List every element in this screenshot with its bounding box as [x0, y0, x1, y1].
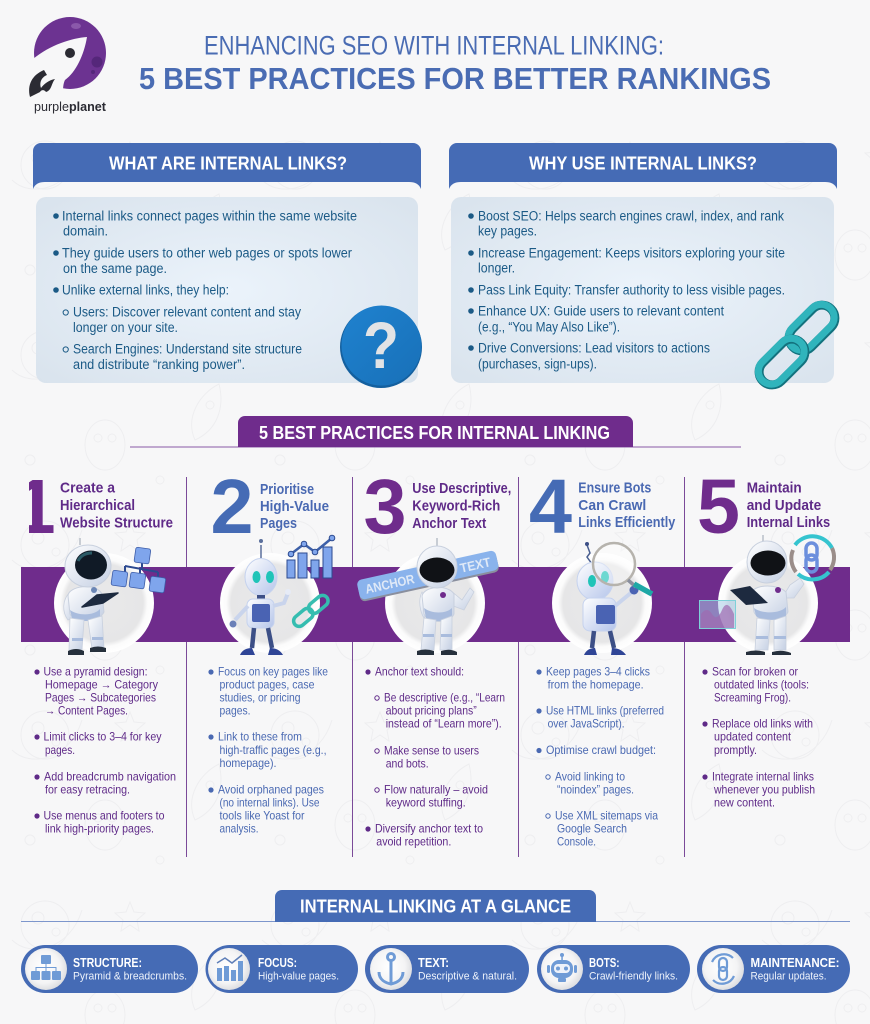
- step 2: prioritise high-value pages: [208, 464, 335, 836]
- step heading 4: [578, 479, 676, 531]
- step heading 1: [60, 480, 173, 532]
- step 4 list: Keep pages 3–4 clicks: [546, 664, 650, 678]
- icon: sync link: [712, 954, 734, 984]
- step 4 list: Avoid linking to: [555, 770, 625, 784]
- step 1 list: Use a pyramid design:: [44, 664, 148, 678]
- panel header: what are internal links: WHAT ARE INTERNAL LINKS?: [109, 154, 347, 174]
- summary pill: maintenance: Regular updates.: [750, 970, 826, 982]
- step 3 list: Make sense to users: [384, 744, 479, 758]
- step 3 list: about pricing plans”: [386, 704, 477, 718]
- step 3 list: [365, 664, 505, 848]
- step 3 list: instead of “Learn more”).: [386, 716, 502, 730]
- summary pill: bots: Crawl-friendly links.: [589, 970, 678, 982]
- step heading 3: Use Descriptive,: [412, 480, 511, 497]
- step 4 list: from the homepage.: [548, 678, 644, 692]
- step 3 list: and bots.: [386, 756, 429, 770]
- step 1 list: for easy retracing.: [45, 782, 130, 796]
- step 2 list: product pages, case: [220, 678, 315, 692]
- step 5: maintain and update internal links: [697, 464, 834, 810]
- icon: anchor: [379, 954, 403, 984]
- step 5 list: promptly.: [714, 743, 757, 757]
- summary pill: bots: [537, 945, 690, 993]
- step heading 2: Pages: [260, 515, 297, 532]
- summary pill: bots: BOTS:: [589, 956, 620, 970]
- summary pill: text: Descriptive & natural.: [418, 970, 517, 982]
- icon: hierarchy: [31, 955, 61, 980]
- step heading 5: Maintain: [747, 480, 802, 497]
- summary pill: focus: FOCUS:: [258, 956, 297, 970]
- panel body: benefits list: (purchases, sign-ups).: [478, 356, 597, 372]
- step 2 list: Focus on key pages like: [218, 664, 328, 678]
- illustration: astronaut with anchor text bar: TEXT: [458, 554, 492, 576]
- step 5 list: Integrate internal links: [712, 770, 814, 784]
- step 1 list: Homepage → Category: [45, 678, 158, 692]
- summary pill: focus: High-value pages.: [258, 970, 339, 982]
- step number 4: 4: [529, 464, 572, 550]
- step 4 list: Google Search: [557, 822, 627, 836]
- step heading 3: Keyword-Rich: [412, 498, 500, 515]
- step 4 list: “noindex” pages.: [557, 782, 634, 796]
- panel body: definition list: Search Engines: Understand site structure: [73, 342, 302, 356]
- step 3 list: Anchor text should:: [375, 664, 464, 678]
- panel body: definition list: longer on your site.: [73, 320, 178, 335]
- step 4 list: Optimise crawl budget:: [546, 743, 656, 757]
- summary pill: maintenance: [697, 945, 850, 993]
- panel: why use internal links: [449, 143, 840, 390]
- step 4 list: [536, 664, 664, 848]
- step 2 list: (no internal links). Use: [220, 796, 320, 810]
- summary pill: structure: STRUCTURE:: [73, 956, 142, 970]
- step 2 list: [208, 664, 328, 836]
- panel body: definition list: Unlike external links, they help:: [62, 282, 229, 298]
- step 4 list: over JavaScript).: [548, 716, 625, 730]
- step 5 list: new content.: [714, 796, 775, 810]
- panel body: definition list: Users: Discover relevant content and stay: [73, 304, 301, 320]
- panel body: definition list: [36, 197, 418, 383]
- panel body: definition list: Internal links connect pages within the same website: [62, 208, 357, 224]
- step 2 list: high-traffic pages (e.g.,: [220, 743, 326, 757]
- panel body: definition list: on the same page.: [63, 261, 167, 276]
- icon: question mark: ?: [363, 308, 399, 382]
- step 2 list: Avoid orphaned pages: [218, 782, 324, 796]
- section banner: 5 best practices: [130, 416, 741, 447]
- step 1 list: link high-priority pages.: [45, 822, 154, 836]
- summary pill: structure: Pyramid & breadcrumbs.: [73, 970, 187, 982]
- step 1 list: Add breadcrumb navigation: [44, 770, 176, 784]
- step heading 4: Links Efficiently: [578, 514, 676, 531]
- step 5 list: updated content: [714, 730, 792, 744]
- panel body: benefits list: longer.: [478, 260, 515, 276]
- summary pill: maintenance: MAINTENANCE:: [750, 956, 840, 970]
- illustration: astronaut with anchor text bar: ANCHOR: [364, 571, 416, 597]
- step heading 4: Ensure Bots: [578, 479, 651, 496]
- panel body: definition list: domain.: [63, 224, 108, 238]
- panel body: benefits list: Drive Conversions: Lead visitors to actions: [478, 340, 710, 356]
- step 3: use descriptive, keyword-rich anchor text: [356, 464, 511, 848]
- panel header: why use internal links: [449, 143, 837, 189]
- panel body: benefits list: Boost SEO: Helps search engines crawl, index, and rank: [478, 208, 784, 224]
- panel body: definition list: They guide users to other web pages or spots lower: [62, 246, 352, 260]
- step 4: ensure bots can crawl links efficiently: [529, 464, 676, 848]
- step 5 list: [702, 664, 815, 810]
- purple band behind characters: [21, 567, 850, 642]
- panel: what are internal links: [33, 143, 422, 388]
- summary pill: focus: [206, 945, 358, 993]
- step number 2: 2: [210, 464, 254, 550]
- section banner: 5 best practices: 5 BEST PRACTICES FOR INTERNAL LINKING: [259, 423, 610, 443]
- icon: question mark: [340, 306, 422, 388]
- icon: chain link: [753, 299, 840, 390]
- step heading 2: Prioritise: [260, 481, 314, 498]
- step 1 list: pages.: [45, 743, 75, 757]
- step 2 list: analysis.: [220, 822, 258, 836]
- step 1: create a hierarchical website structure: [29, 480, 176, 835]
- step 2 list: studies, or pricing: [220, 690, 300, 704]
- step heading 1: Website Structure: [60, 515, 173, 532]
- step number 5: 5: [697, 464, 740, 550]
- step 5 list: whenever you publish: [713, 782, 815, 796]
- step heading 3: Anchor Text: [412, 515, 486, 532]
- step 3 list: keyword stuffing.: [386, 796, 466, 810]
- logo: purpleplanet: purpleplanet: [34, 99, 107, 114]
- step 2 list: pages.: [220, 704, 250, 718]
- step 2 list: Link to these from: [218, 730, 302, 744]
- step heading 2: [260, 481, 329, 532]
- logo: purpleplanet: [28, 17, 107, 114]
- title: ENHANCING SEO WITH INTERNAL LINKING:: [204, 30, 664, 60]
- step heading 3: [412, 480, 511, 532]
- step heading 1: Create a: [60, 480, 116, 497]
- step 5 list: outdated links (tools:: [714, 678, 809, 692]
- summary pill: structure: [21, 945, 198, 993]
- step 1 list: Limit clicks to 3–4 for key: [44, 730, 162, 744]
- panel body: benefits list: Pass Link Equity: Transfer authority to less visible pages.: [478, 282, 785, 298]
- step 1 list: Use menus and footers to: [44, 808, 165, 822]
- illustration: astronaut with anchor text bar: [356, 538, 500, 655]
- step 2 list: homepage).: [220, 756, 276, 770]
- step 3 list: Be descriptive (e.g., “Learn: [384, 690, 505, 704]
- step 4 list: Use XML sitemaps via: [555, 808, 658, 822]
- illustration: astronaut with hierarchy diagram: [54, 538, 166, 655]
- step 5 list: Scan for broken or: [712, 664, 798, 678]
- section banner: internal linking at a glance: [21, 890, 850, 922]
- step 2 list: tools like Yoast for: [220, 808, 304, 822]
- step heading 5: and Update: [747, 497, 821, 514]
- step 4 list: Console.: [557, 834, 596, 848]
- title: [139, 30, 771, 96]
- panel body: benefits list: Enhance UX: Guide users to relevant content: [478, 304, 724, 318]
- step 3 list: avoid repetition.: [376, 834, 451, 848]
- step 5 list: Replace old links with: [712, 716, 813, 730]
- step 1 list: Pages → Subcategories: [45, 690, 156, 704]
- step heading 2: High-Value: [260, 498, 329, 515]
- panel body: benefits list: key pages.: [478, 224, 537, 238]
- illustration: astronaut with tablet and sync icon: [700, 535, 834, 655]
- panel body: benefits list: Increase Engagement: Keeps visitors exploring your site: [478, 246, 785, 260]
- step heading 5: Internal Links: [747, 514, 830, 531]
- panel body: definition list: and distribute “ranking power”.: [73, 357, 245, 372]
- panel header: what are internal links: [33, 143, 421, 189]
- step 3 list: Flow naturally – avoid: [384, 782, 488, 796]
- step 4 list: Use HTML links (preferred: [546, 704, 664, 718]
- step heading 5: [747, 480, 830, 531]
- icon: robot: [547, 953, 577, 982]
- illustration: robot with chart and chain: [220, 535, 335, 655]
- panel header: why use internal links: WHY USE INTERNAL LINKS?: [529, 154, 757, 174]
- step number 3: 3: [364, 464, 406, 550]
- step heading 4: Can Crawl: [578, 497, 646, 514]
- section banner: internal linking at a glance: INTERNAL LINKING AT A GLANCE: [300, 897, 571, 917]
- step number 1: 1: [14, 464, 57, 550]
- panel body: benefits list: (e.g., “You May Also Like”).: [478, 320, 620, 334]
- step 1 list: [34, 664, 176, 836]
- step 1 list: → Content Pages.: [45, 704, 128, 718]
- icon: bar chart: [217, 955, 243, 981]
- title: 5 BEST PRACTICES FOR BETTER RANKINGS: [139, 61, 771, 96]
- step 5 list: Screaming Frog).: [714, 690, 791, 704]
- summary pill: text: TEXT:: [418, 956, 449, 970]
- step heading 1: Hierarchical: [60, 497, 135, 514]
- step 3 list: Diversify anchor text to: [375, 822, 483, 836]
- summary pill: text: [365, 945, 529, 993]
- illustration: robot with magnifying glass: [552, 542, 652, 655]
- panel body: benefits list: [451, 197, 834, 383]
